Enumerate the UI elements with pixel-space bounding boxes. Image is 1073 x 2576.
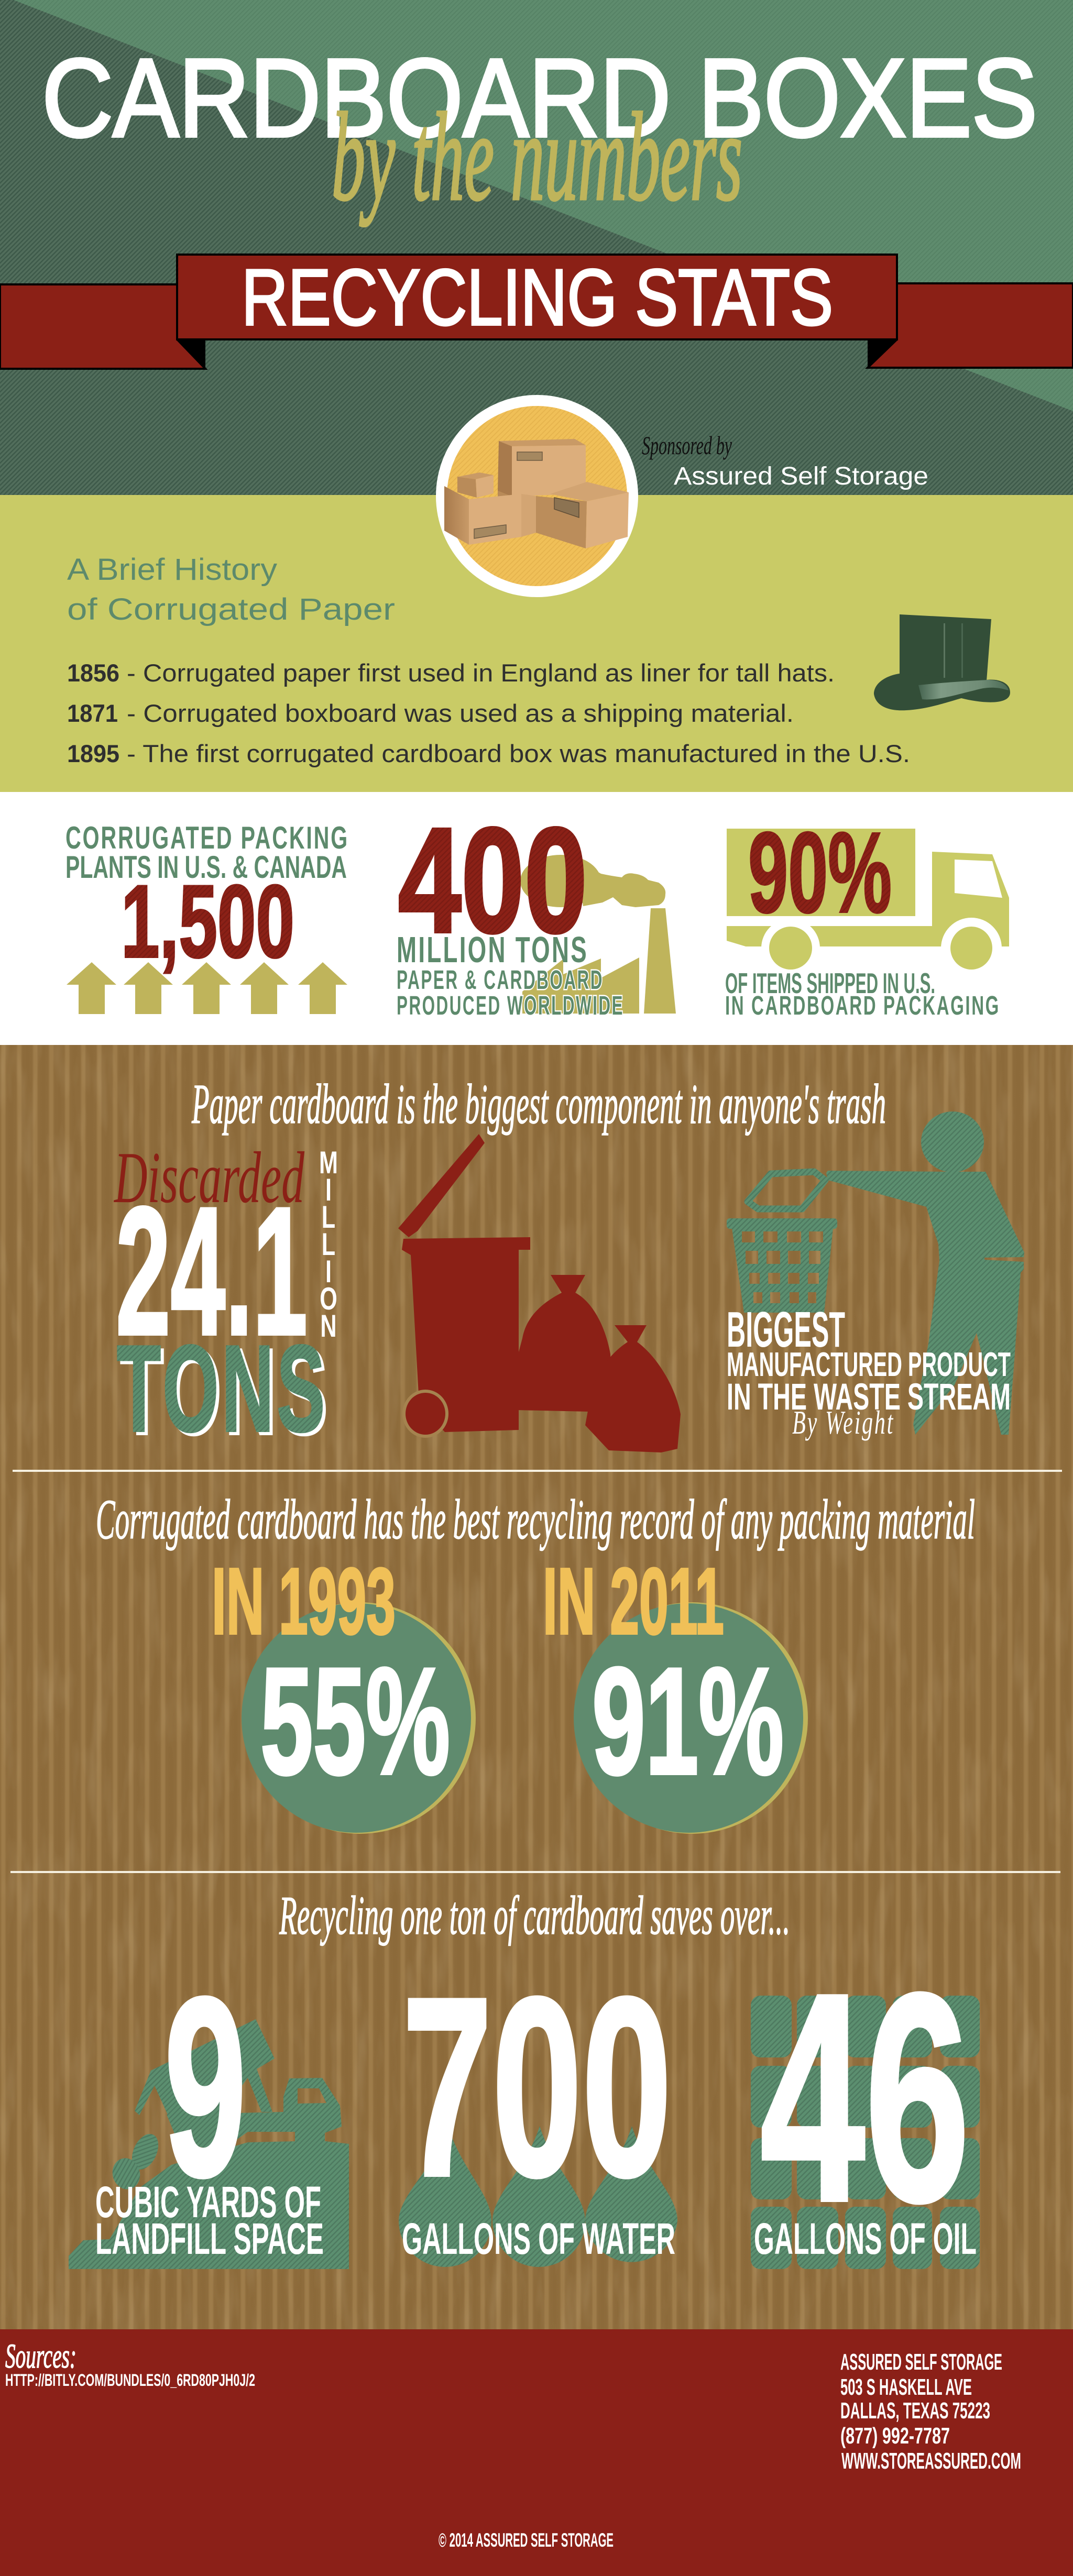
stat: 400 million tons: MILLION TONS	[397, 929, 588, 970]
panel: key stats background	[0, 792, 1073, 1045]
stat: 1,500 plants	[65, 820, 349, 1014]
panel: cardboard background	[0, 1045, 1073, 2329]
caption: by weight: By Weight	[792, 1404, 894, 1441]
history heading	[67, 553, 395, 626]
vertical label: million: M	[319, 1146, 338, 1181]
stat: 400 million tons	[397, 797, 676, 1020]
stat: 1,500 plants: 1,500	[121, 864, 294, 979]
stat: 46 gallons of oil	[751, 1932, 980, 2269]
history timeline: 1895	[67, 740, 119, 767]
vertical label: million: N	[320, 1309, 337, 1344]
stat: 24.1 million tons discarded: TONS	[117, 1319, 328, 1457]
history timeline: - Corrugated boxboard was used as a shipping material.	[127, 699, 794, 727]
stat: 1993 55%: 55%	[260, 1636, 450, 1806]
history timeline: - Corrugated paper first used in England as liner for tall hats.	[127, 659, 835, 687]
vertical label: million: O	[320, 1282, 337, 1317]
stat: 400 million tons: PAPER & CARDBOARD	[397, 965, 604, 995]
panel: header background	[0, 0, 1073, 496]
stat: 2011 91%: IN 2011	[543, 1549, 724, 1654]
contact address: 503 S HASKELL AVE	[840, 2374, 972, 2400]
icon: man dropping litter in basket	[727, 1111, 1024, 1435]
vertical label: million: L	[322, 1227, 335, 1262]
stat: 24.1 million tons discarded: 24.1	[116, 1169, 308, 1373]
icon: arrows	[67, 962, 347, 1014]
ribbon banner	[0, 253, 1073, 369]
callout: biggest manufactured product	[727, 1302, 1011, 1418]
stat: 90% shipped: 90%	[748, 809, 892, 937]
sources: Sources:	[5, 2337, 76, 2375]
stat: 9 cubic yards: 9	[165, 1945, 246, 2229]
stat: 1993 55%: IN 1993	[212, 1549, 396, 1654]
contact address	[840, 2349, 1021, 2474]
icon: factory	[520, 855, 676, 1014]
sources: HTTP://BITLY.COM/BUNDLES/0_6RD80PJH0J/2	[5, 2371, 255, 2390]
icon: cardboard boxes in circle	[436, 395, 638, 597]
sponsor label: Assured Self Storage	[674, 463, 928, 490]
stat: 9 cubic yards: LANDFILL SPACE	[95, 2214, 324, 2263]
stat: 1993 55%	[212, 1549, 476, 1834]
stat: 90% shipped	[725, 809, 1020, 1020]
copyright: © 2014 ASSURED SELF STORAGE	[439, 2529, 614, 2551]
stat: 1,500 plants: CORRUGATED PACKING	[65, 820, 349, 855]
contact address: (877) 992-7787	[840, 2423, 950, 2449]
icon: red wheelie bin and bags	[398, 1134, 681, 1452]
stat: 700 gallons of water: 700	[402, 1945, 672, 2229]
vertical label: million: I	[325, 1173, 332, 1208]
stat: 9 cubic yards	[69, 1945, 349, 2269]
history heading: of Corrugated Paper	[67, 592, 395, 626]
history timeline: 1871	[67, 699, 118, 727]
sponsor label: Sponsored by	[642, 431, 732, 460]
sources	[5, 2337, 255, 2390]
stat: 400 million tons: PRODUCED WORLDWIDE	[397, 990, 624, 1020]
ribbon heading: RECYCLING STATS	[242, 253, 833, 342]
sponsor label	[642, 431, 928, 490]
panel: history background	[0, 495, 1073, 792]
stat: 400 million tons: 400	[398, 797, 587, 964]
icon: oil barrels	[751, 1996, 980, 2269]
stat: 24.1 million tons discarded: Discarded	[114, 1137, 305, 1218]
icon: top hat	[874, 614, 1010, 710]
history timeline: - The first corrugated cardboard box was manufactured in the U.S.	[127, 740, 910, 767]
icon: dump truck on landfill	[69, 2019, 349, 2269]
stat: 700 gallons of water: GALLONS OF WATER	[402, 2214, 675, 2263]
stat: 700 gallons of water	[399, 1945, 677, 2267]
stat: 9 cubic yards: CUBIC YARDS OF	[95, 2177, 321, 2227]
stat: 24.1 million tons discarded: TONS	[120, 1323, 331, 1460]
icon: truck	[727, 829, 1020, 978]
stat: 1,500 plants: PLANTS IN U.S. & CANADA	[65, 850, 347, 885]
vertical label: million: L	[322, 1200, 335, 1235]
icon: water drops	[399, 2126, 677, 2267]
vertical label: million: I	[325, 1254, 332, 1290]
history timeline	[67, 659, 910, 767]
history timeline: 1856	[67, 659, 119, 687]
stat: 2011 91%	[543, 1549, 808, 1834]
stat: 24.1 million tons discarded	[114, 1137, 338, 1460]
callout: biggest manufactured product: BIGGEST	[727, 1302, 845, 1358]
stat: 2011 91%: 91%	[592, 1636, 784, 1806]
panel: footer	[0, 2329, 1073, 2576]
history heading: A Brief History	[67, 553, 277, 587]
